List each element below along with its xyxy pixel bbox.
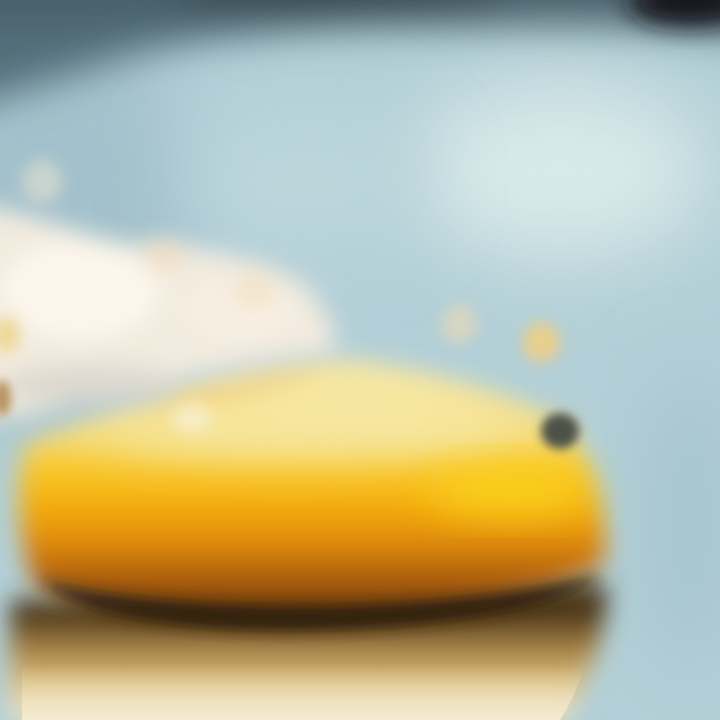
floating crumb upper left bbox=[22, 160, 62, 204]
crumb on fruit bbox=[172, 404, 212, 432]
cream peach patches bbox=[147, 243, 273, 304]
black corner at top right bbox=[628, 0, 720, 26]
dark speck at left edge bbox=[0, 380, 11, 416]
floating crumb pale bbox=[441, 304, 477, 344]
floating crumb golden bbox=[522, 322, 560, 362]
dark top band bbox=[0, 0, 720, 120]
dark shadow under fruit bbox=[40, 575, 600, 630]
reflection base reaching the bottom edge bbox=[22, 665, 584, 720]
fruit top highlight bbox=[90, 380, 520, 460]
cream topping bbox=[0, 205, 335, 420]
dark seed spot bbox=[541, 413, 579, 449]
fruit slice bbox=[19, 360, 605, 619]
reflection beneath the fruit bbox=[10, 585, 608, 720]
fruit golden edge under cream bbox=[150, 362, 330, 410]
fruit saturated yellow side bbox=[430, 466, 590, 514]
cream warm speck left bbox=[0, 317, 20, 353]
